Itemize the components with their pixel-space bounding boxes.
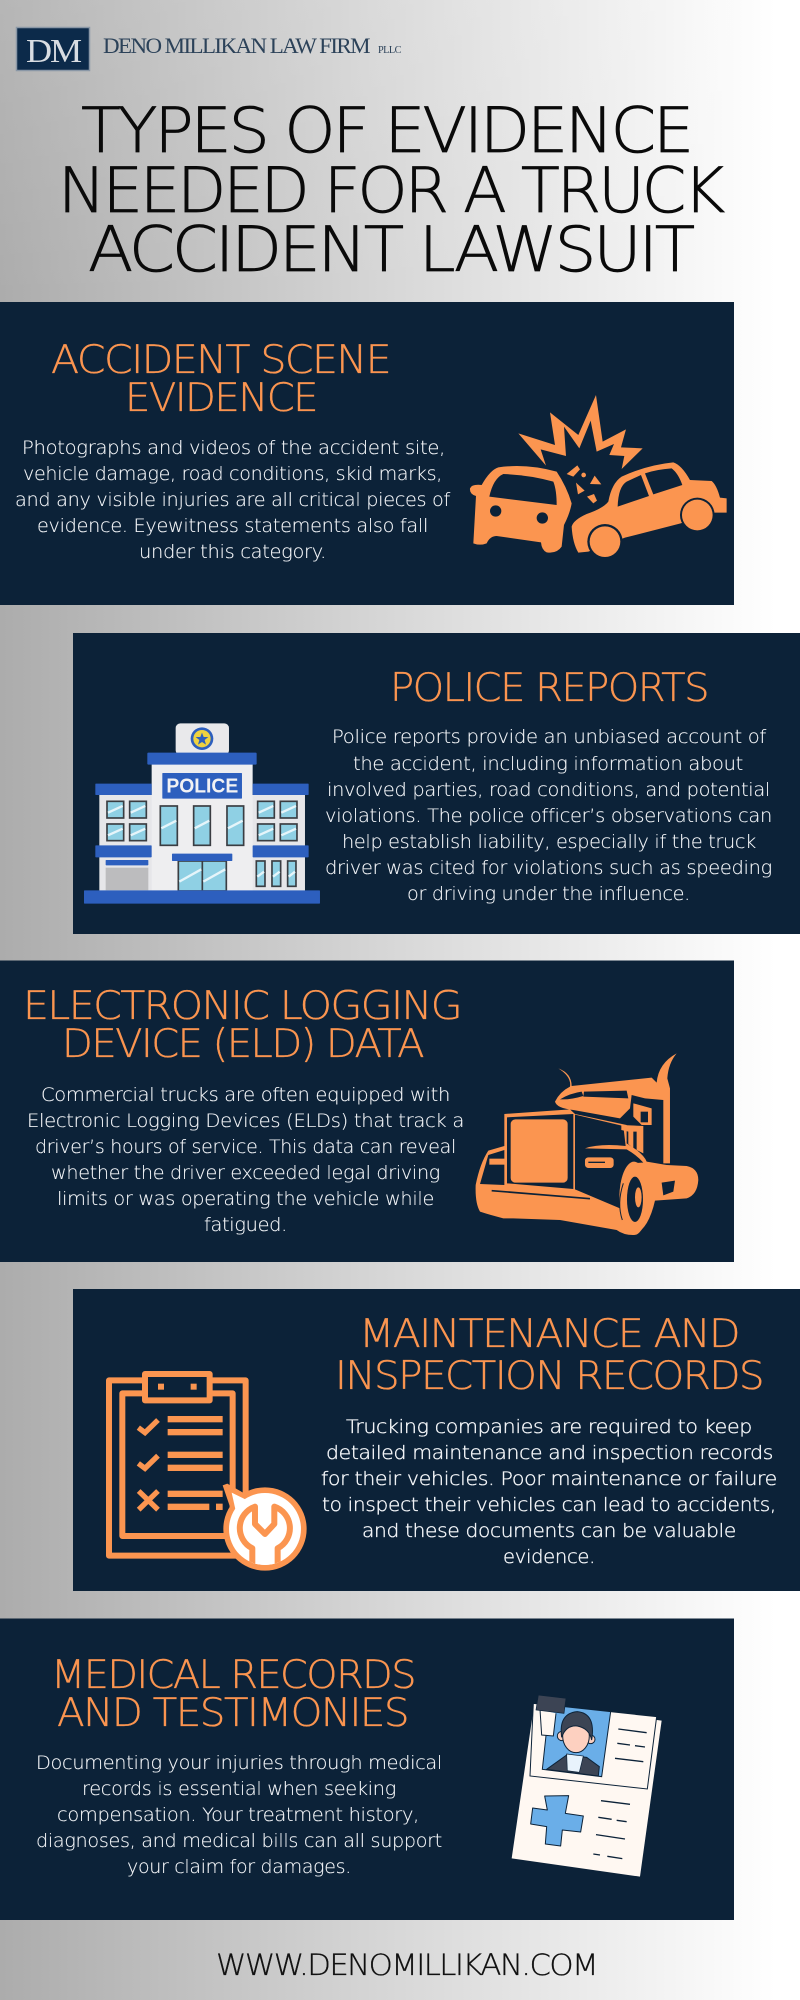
panel: maintenance and inspection records — [73, 1289, 800, 1591]
text: police reports description: or driving under the influence. — [407, 883, 690, 905]
icon: police station building — [84, 723, 320, 904]
panel: electronic logging device data — [0, 960, 734, 1262]
text: maintenance description: and these documents can be valuable — [362, 1520, 736, 1542]
heading: accident scene evidence: EVIDENCE — [125, 376, 317, 421]
heading: electronic logging device data — [23, 984, 461, 1067]
text: police reports description: the accident, including information about — [353, 753, 743, 775]
text: medical records description — [36, 1752, 442, 1878]
panel: medical records and testimonies — [0, 1618, 734, 1920]
text: medical records description: diagnoses, and medical bills can all support — [36, 1830, 442, 1852]
logo: Deno Millikan Law Firm: DENO MILLIKAN LAW FIRM — [103, 33, 370, 58]
text: accident scene description: evidence. Eyewitness statements also fall — [37, 515, 428, 537]
text: maintenance description: to inspect their vehicles can lead to accidents, — [322, 1494, 776, 1516]
text: medical records description: your claim for damages. — [127, 1856, 351, 1878]
heading: electronic logging device data: DEVICE (ELD) DATA — [62, 1022, 424, 1067]
text: medical records description: Documenting your injuries through medical — [36, 1752, 442, 1774]
text: ELD description — [27, 1084, 464, 1236]
heading: electronic logging device data: ELECTRONIC LOGGING — [23, 984, 461, 1029]
text: ELD description: Commercial trucks are often equipped with — [41, 1084, 450, 1106]
icon: police station building: POLICE — [166, 776, 238, 798]
title: ACCIDENT LAWSUIT — [88, 213, 694, 286]
text: accident scene description: and any visible injuries are all critical pieces of — [15, 489, 451, 511]
icon: semi truck — [476, 1053, 698, 1235]
text: accident scene description: vehicle damage, road conditions, skid marks, — [23, 463, 442, 485]
heading: maintenance and inspection records: INSPECTION RECORDS — [335, 1354, 763, 1399]
heading: medical records and testimonies: AND TESTIMONIES — [57, 1691, 408, 1736]
text: accident scene description: under this category. — [139, 541, 326, 563]
text: police reports description: help establish liability, especially if the truck — [342, 831, 756, 853]
text: police reports description — [325, 726, 772, 905]
text: maintenance description: Trucking companies are required to keep — [346, 1416, 752, 1438]
text: ELD description: limits or was operating the vehicle while — [57, 1188, 434, 1210]
text: accident scene description — [15, 437, 451, 563]
text: police reports description: Police reports provide an unbiased account of — [332, 726, 767, 748]
text: ELD description: Electronic Logging Devices (ELDs) that track a — [27, 1110, 464, 1132]
logo: Deno Millikan Law Firm — [16, 28, 402, 70]
text: accident scene description: Photographs and videos of the accident site, — [22, 437, 445, 459]
heading: maintenance and inspection records — [335, 1312, 763, 1399]
logo: Deno Millikan Law Firm: DM — [26, 33, 82, 70]
text: maintenance description — [321, 1416, 777, 1568]
footer: website address: WWW.DENOMILLIKAN.COM — [216, 1948, 597, 1982]
title: TYPES OF EVIDENCE — [81, 94, 691, 167]
icon: inspection clipboard with wrench — [109, 1374, 307, 1573]
text: police reports description: driver was cited for violations such as speeding — [325, 857, 772, 879]
heading: medical records and testimonies: MEDICAL RECORDS — [51, 1653, 415, 1698]
text: medical records description: records is essential when seeking — [82, 1778, 396, 1800]
panel: police reports — [73, 633, 800, 934]
title: NEEDED FOR A TRUCK — [58, 154, 724, 227]
text: maintenance description: for their vehicles. Poor maintenance or failure — [321, 1468, 777, 1490]
panel: accident scene evidence — [0, 302, 734, 605]
heading: accident scene evidence: ACCIDENT SCENE — [51, 338, 390, 383]
icon: car crash — [470, 395, 727, 559]
text: police reports description: violations. The police officer’s observations can — [325, 805, 772, 827]
text: maintenance description: evidence. — [503, 1546, 595, 1568]
text: ELD description: driver’s hours of service. This data can reveal — [35, 1136, 456, 1158]
logo: Deno Millikan Law Firm: PLLC — [378, 45, 402, 56]
heading: maintenance and inspection records: MAINTENANCE AND — [359, 1312, 739, 1357]
text: police reports description: involved parties, road conditions, and potential — [327, 779, 770, 801]
text: medical records description: compensation. Your treatment history, — [57, 1804, 419, 1826]
text: ELD description: fatigued. — [204, 1214, 287, 1236]
text: maintenance description: detailed maintenance and inspection records — [326, 1442, 773, 1464]
icon: medical ID document — [512, 1695, 662, 1877]
title — [58, 94, 724, 286]
heading: medical records and testimonies — [51, 1653, 415, 1736]
text: ELD description: whether the driver exceeded legal driving — [51, 1162, 440, 1184]
heading: accident scene evidence — [51, 338, 390, 421]
heading: police reports: POLICE REPORTS — [390, 666, 708, 711]
